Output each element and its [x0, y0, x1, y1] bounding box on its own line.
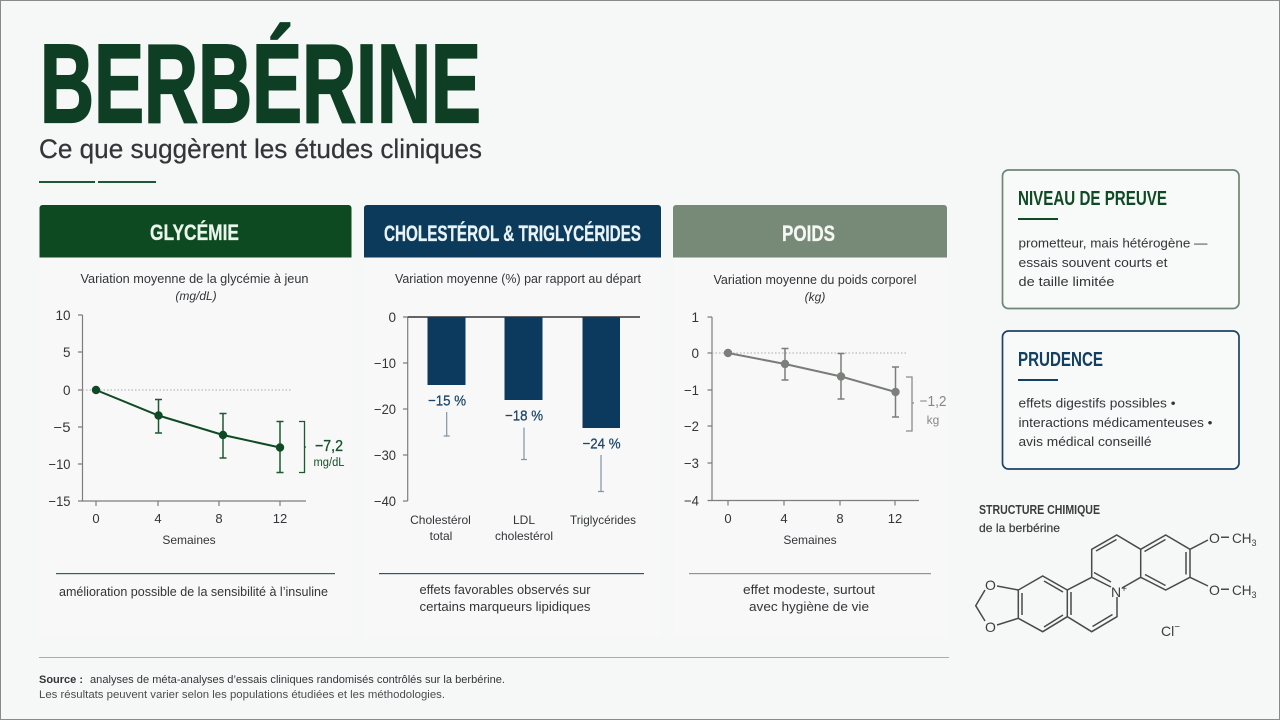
line chart: poids: −3 [684, 456, 699, 471]
line chart: poids: 1 [691, 310, 699, 325]
line chart: poids: 4 [780, 511, 788, 526]
line chart: poids: −4 [684, 494, 699, 508]
line chart: glycémie: 10 [55, 308, 70, 323]
line chart: poids: 0 [724, 511, 732, 526]
panel note: glycémie: amélioration possible de la sensibilité à l’insuline [59, 585, 328, 599]
bar: LDL [504, 317, 543, 460]
source footer: Source : [39, 674, 83, 686]
chart subtitle: (kg) [805, 290, 825, 304]
bar: triglycérides [582, 317, 620, 492]
bar chart: cholestérol [374, 310, 640, 543]
bracket callout: kg [927, 413, 939, 427]
line chart: glycémie: 4 [154, 511, 162, 526]
callout: prudence: PRUDENCE [1018, 349, 1103, 371]
panel note: cholestérol: effets favorables observés sur [420, 583, 590, 597]
panel: poids [673, 205, 947, 637]
line chart: poids: Semaines [783, 533, 837, 547]
heading: cholestérol: CHOLESTÉROL & TRIGLYCÉRIDES [384, 221, 641, 246]
source footer: analyses de méta-analyses d’essais cliniques randomisés contrôlés sur la berbérine. [90, 674, 505, 686]
line chart: glycémie: 12 [273, 511, 287, 526]
callout: niveau de preuve: NIVEAU DE PREUVE [1018, 188, 1167, 210]
bar chart: cholestérol: −40 [374, 494, 396, 509]
chemical structure diagram: O [985, 577, 996, 593]
bar chart: cholestérol: 0 [388, 310, 396, 325]
chemical structure diagram [976, 530, 1257, 639]
chemical structure diagram: CH [1232, 583, 1252, 598]
bar: LDL: −18 % [505, 408, 543, 424]
chemical structure diagram: + [1121, 584, 1127, 595]
chemical structure diagram: O [1209, 582, 1220, 598]
chemical structure diagram: O [985, 619, 996, 635]
panel note: poids: effet modeste, surtout [743, 583, 876, 597]
panel note: poids: avec hygiène de vie [749, 600, 869, 614]
callout: prudence: avis médical conseillé [1018, 434, 1152, 449]
line chart: glycémie [48, 308, 345, 547]
line chart: poids: −2 [684, 419, 699, 434]
panel: glycémie [40, 205, 352, 637]
bar chart: cholestérol: cholestérol [495, 529, 553, 543]
line chart: poids: 12 [888, 511, 902, 526]
line chart: glycémie: 0 [92, 511, 100, 526]
bracket callout [299, 422, 345, 472]
title: BERBÉRINE [40, 22, 481, 146]
line chart: glycémie: Semaines [162, 533, 216, 547]
heading: glycémie: GLYCÉMIE [150, 220, 239, 245]
heading: cholestérol [364, 205, 661, 258]
bar chart: cholestérol: −20 [374, 402, 396, 417]
heading: poids [673, 205, 947, 258]
chemical structure heading: STRUCTURE CHIMIQUE [979, 503, 1100, 517]
chart subtitle: Variation moyenne de la glycémie à jeun [80, 272, 309, 286]
line chart: glycémie: −5 [54, 420, 70, 435]
line chart: poids: 0 [691, 346, 699, 361]
panel note: cholestérol: certains marqueurs lipidiques [420, 600, 590, 614]
line chart: glycémie: −10 [48, 457, 70, 472]
chemical structure diagram: 3 [1252, 590, 1257, 600]
callout: niveau de preuve: de taille limitée [1018, 274, 1114, 289]
subtitle: Ce que suggèrent les études cliniques [39, 134, 482, 164]
bar: triglycérides: −24 % [582, 436, 620, 452]
line chart: glycémie: 5 [63, 345, 70, 360]
bar chart: cholestérol: Triglycérides [570, 513, 636, 527]
bracket callout: −1,2 [920, 393, 946, 410]
callout: prudence: effets digestifs possibles • [1018, 396, 1176, 410]
source footer: Les résultats peuvent varier selon les populations étudiées et les méthodologies. [39, 689, 445, 701]
bracket callout [906, 377, 946, 431]
bracket callout: −7,2 [315, 438, 343, 455]
chemical structure heading: de la berbérine [979, 521, 1060, 535]
line chart: poids: −1 [684, 383, 699, 398]
heading: glycémie [40, 205, 352, 258]
panel: cholestérol [364, 205, 661, 637]
chart subtitle: (mg/dL) [175, 289, 217, 303]
chemical structure diagram: CH [1232, 531, 1252, 546]
line chart: poids: 8 [836, 511, 844, 526]
callout: prudence: interactions médicamenteuses • [1018, 415, 1213, 430]
source footer [39, 657, 949, 701]
callout: niveau de preuve: prometteur, mais hétérogène — [1018, 236, 1208, 250]
line chart: glycémie: 8 [215, 511, 223, 526]
chemical structure diagram: 3 [1252, 538, 1257, 548]
panel note: poids [689, 573, 931, 614]
chart subtitle [80, 272, 309, 303]
chemical structure diagram: O [1209, 530, 1220, 546]
chemical structure heading [979, 503, 1100, 535]
bar chart: cholestérol: −10 [374, 356, 396, 371]
chart subtitle: Variation moyenne (%) par rapport au départ [395, 272, 642, 286]
line chart: glycémie: 0 [63, 383, 70, 398]
chemical structure diagram: − [1174, 622, 1180, 633]
heading: poids: POIDS [782, 221, 835, 246]
callout: prudence [1002, 331, 1239, 469]
chart subtitle: Variation moyenne du poids corporel [714, 273, 916, 287]
title rule [39, 181, 156, 183]
bar chart: cholestérol: Cholestérol [410, 513, 471, 527]
callout: niveau de preuve: essais souvent courts et [1018, 255, 1168, 270]
chart subtitle [714, 273, 916, 304]
line chart: glycémie: −15 [48, 494, 70, 509]
bar chart: cholestérol: LDL [513, 513, 535, 527]
bar: cholestérol total [428, 317, 466, 436]
bar chart: cholestérol: total [430, 529, 452, 543]
bar chart: cholestérol: −30 [374, 448, 396, 463]
line chart: poids [684, 310, 946, 547]
chemical structure diagram: N [1111, 584, 1121, 600]
chemical structure diagram: Cl [1161, 623, 1174, 639]
bracket callout: mg/dL [314, 457, 345, 469]
panel note: cholestérol [379, 573, 644, 614]
bar: cholestérol total: −15 % [428, 392, 466, 410]
callout: niveau de preuve [1002, 170, 1239, 308]
